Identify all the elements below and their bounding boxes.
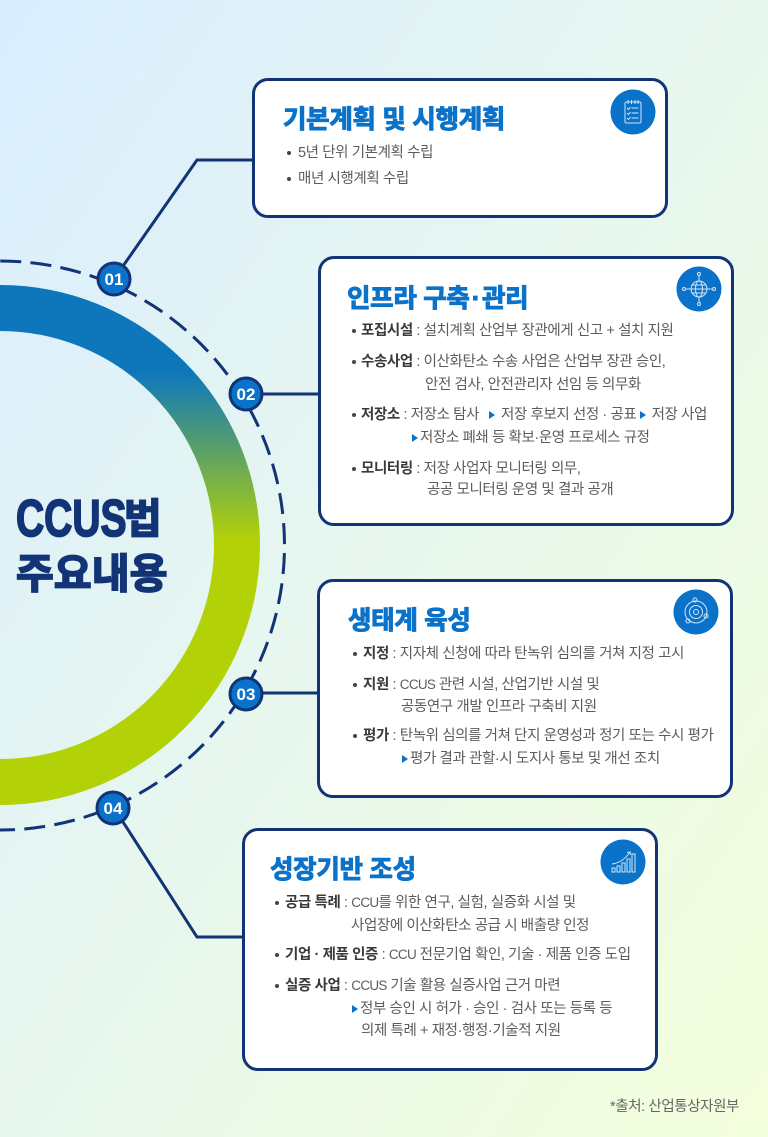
node 03: [228, 676, 264, 712]
icon: orbit: [674, 590, 718, 634]
icon: globe network: [676, 266, 722, 312]
icon: checklist: [610, 90, 656, 134]
heading: 생태계 육성: [348, 607, 471, 635]
text block: 평가 결과 관할·시 도지사 통보 및 개선 조치: [410, 751, 660, 767]
bullet list: 매년 시행계획 수립: [298, 171, 409, 187]
panel: 생태계 육성: [317, 579, 733, 798]
text block: [353, 646, 714, 767]
bullet list: 5년 단위 기본계획 수립: [298, 145, 433, 161]
heading: CCUS법 주요내용: 법: [124, 496, 162, 542]
node 02: 02: [237, 385, 255, 404]
text block: 모니터링 : 저장 사업자 모니터링 의무,: [361, 461, 581, 477]
text block: 사업장에 이산화탄소 공급 시 배출량 인정: [351, 918, 589, 934]
heading: CCUS법 주요내용: 주요내용: [16, 551, 168, 597]
node 03: 03: [237, 685, 255, 704]
text block: [352, 322, 707, 498]
icon: growth chart: [600, 840, 646, 884]
panel: 기본계획 및 시행계획: [252, 78, 668, 218]
text block: 저장소 : 저장소 탐사 저장 후보지 선정 · 공표 저장 사업: [361, 407, 707, 423]
heading: CCUS법 주요내용: [16, 490, 168, 597]
text block: 공공 모니터링 운영 및 결과 공개: [427, 482, 613, 498]
text block: 평가 : 탄녹위 심의를 거쳐 단지 운영성과 정기 또는 수시 평가: [363, 728, 713, 744]
panel: 인프라 구축·관리: [318, 256, 734, 526]
text block: 지원 : CCUS 관련 시설, 산업기반 시설 및: [363, 677, 599, 693]
text block: 기업 · 제품 인증 : CCU 전문기업 확인, 기술 · 제품 인증 도입: [285, 947, 631, 963]
text block: 정부 승인 시 허가 · 승인 · 검사 또는 등록 등: [360, 1001, 612, 1017]
node 01: 01: [105, 270, 123, 289]
heading: CCUS법 주요내용: CCUS: [16, 490, 127, 548]
node 01: [96, 262, 132, 296]
node 02: [228, 376, 264, 412]
node 04: 04: [104, 799, 123, 818]
text block: 공급 특례 : CCU를 위한 연구, 실험, 실증화 시설 및: [285, 895, 576, 911]
text block: 포집시설 : 설치계획 산업부 장관에게 신고 + 설치 지원: [361, 323, 673, 339]
text block: 실증 사업 : CCUS 기술 활용 실증사업 근거 마련: [285, 978, 560, 994]
heading: 기본계획 및 시행계획: [283, 106, 505, 134]
text block: 지정 : 지자체 신청에 따라 탄녹위 심의를 거쳐 지정 고시: [363, 646, 684, 662]
node 04: [96, 790, 130, 826]
text block: 공동연구 개발 인프라 구축비 지원: [401, 699, 597, 715]
heading: 성장기반 조성: [270, 856, 416, 884]
source note: *출처: 산업통상자원부: [610, 1099, 739, 1115]
bullet list: [287, 144, 433, 187]
text block: [275, 894, 631, 1039]
text block: 저장소 폐쇄 등 확보·운영 프로세스 규정: [420, 430, 650, 446]
panel: 성장기반 조성: [242, 828, 658, 1071]
text block: 의제 특례 + 재정·행정·기술적 지원: [361, 1023, 561, 1039]
text block: 안전 검사, 안전관리자 선임 등 의무화: [425, 377, 641, 393]
heading: 인프라 구축 · 관리: [347, 285, 528, 313]
text block: 수송사업 : 이산화탄소 수송 사업은 산업부 장관 승인,: [361, 354, 665, 370]
